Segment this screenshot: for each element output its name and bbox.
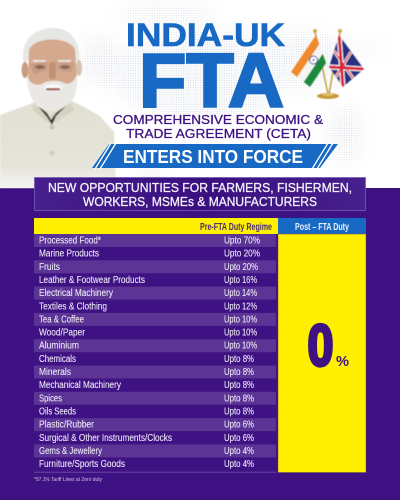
- heading panel: new opportunities: NEW OPPORTUNITIES FOR FARMERS, FISHERMEN,: [48, 181, 352, 195]
- table rows: Upto 8%: [224, 367, 254, 378]
- table header: pre-FTA: [34, 218, 278, 234]
- table rows: Upto 8%: [224, 354, 254, 365]
- table rows: Plastic/Rubber: [39, 420, 95, 431]
- table rows: Upto 20%: [224, 262, 258, 273]
- table rows: Upto 14%: [224, 288, 257, 299]
- table rows: Fruits: [39, 262, 60, 273]
- post-FTA duty column: 0%: [278, 234, 366, 472]
- table rows: Tea & Coffee: [39, 314, 84, 325]
- table rows: Upto 12%: [224, 301, 257, 312]
- world map dots: [78, 0, 386, 177]
- table rows: Furniture/Sports Goods: [39, 459, 125, 470]
- table rows: Marine Products: [39, 249, 99, 260]
- table rows: Chemicals: [39, 354, 76, 365]
- table header: post-FTA: [278, 218, 366, 234]
- table rows: Electrical Machinery: [39, 288, 113, 299]
- table rows: Oils Seeds: [39, 406, 76, 418]
- table rows: Wood/Paper: [39, 328, 86, 338]
- table rows: Processed Food*: [39, 236, 101, 246]
- table rows: Spices: [39, 393, 62, 404]
- table rows: Textiles & Clothing: [39, 301, 107, 312]
- table rows: Upto 8%: [224, 380, 254, 391]
- title: INDIA-UK: INDIA-UK: [126, 17, 285, 53]
- table rows: Upto 4%: [224, 446, 254, 457]
- table rows: Mechanical Machinery: [39, 380, 121, 391]
- subtitle: CETA: TRADE AGREEMENT (CETA): [126, 126, 311, 141]
- table rows: Upto 10%: [224, 314, 257, 325]
- subtitle: CETA: COMPREHENSIVE ECONOMIC &: [113, 112, 323, 127]
- table rows: Gems & Jewellery: [39, 446, 102, 457]
- heading panel: new opportunities: [34, 178, 366, 210]
- title: FTA: FTA: [139, 38, 284, 124]
- table rows: Upto 6%: [224, 433, 254, 444]
- table rows: Upto 8%: [224, 393, 254, 404]
- table rows: Upto 8%: [224, 406, 254, 418]
- portrait: [0, 28, 116, 188]
- banner: enters into force: ENTERS INTO FORCE: [123, 147, 303, 167]
- icon: India and UK table flags: [291, 29, 364, 99]
- table rows: Upto 70%: [224, 236, 260, 246]
- table rows: Aluminium: [39, 341, 79, 352]
- footnote: *97.1% Tariff Lines at Zero duty: [34, 477, 102, 483]
- table header: pre-FTA: Pre-FTA Duty Regime: [200, 222, 272, 233]
- banner: enters into force: [92, 143, 338, 169]
- table rows: Upto 16%: [224, 275, 257, 286]
- subtitle: CETA: [113, 112, 323, 141]
- table header: post-FTA: Post – FTA Duty: [295, 222, 349, 233]
- table rows: Surgical & Other Instruments/Clocks: [39, 433, 172, 444]
- table rows: Upto 20%: [224, 249, 260, 260]
- post-FTA duty column: 0%: 0: [308, 314, 334, 378]
- table rows: [34, 234, 276, 472]
- table rows: Upto 10%: [224, 328, 257, 338]
- table rows: Upto 6%: [224, 420, 254, 431]
- post-FTA duty column: 0%: %: [336, 353, 349, 370]
- table rows: Leather & Footwear Products: [39, 275, 145, 286]
- heading panel: new opportunities: WORKERS, MSMEs & MANUFACTURERS: [83, 195, 317, 209]
- table rows: Upto 10%: [224, 341, 257, 352]
- table rows: Minerals: [39, 367, 71, 378]
- table rows: Upto 4%: [224, 459, 254, 470]
